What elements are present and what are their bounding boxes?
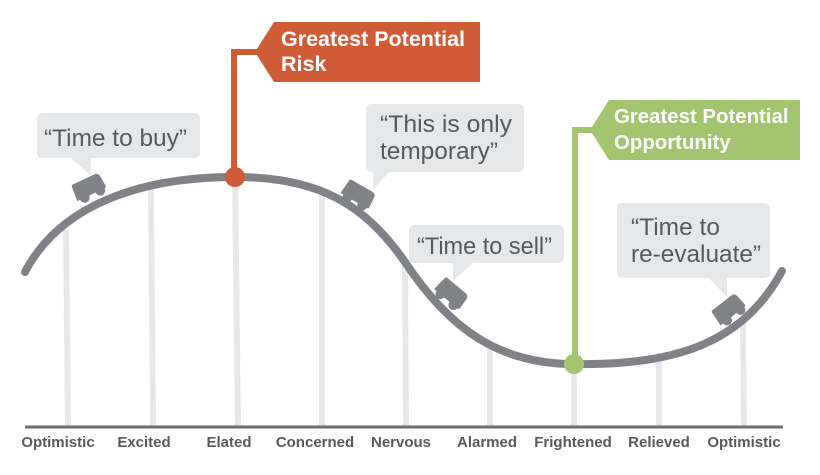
icon: car 1 [70, 172, 109, 206]
axis labels: Nervous [371, 434, 431, 451]
callout: time to re-evaluate: re-evaluate” [631, 241, 761, 268]
cycle curve [25, 177, 782, 364]
axis labels: Elated [206, 434, 252, 451]
icon: car 4 [710, 292, 749, 330]
icon: car 2 [338, 178, 377, 213]
callout: time to sell [409, 225, 564, 281]
marker: greatest potential opportunity: Opportunity [614, 132, 731, 154]
axis labels: Alarmed [457, 434, 517, 451]
axis labels: Excited [117, 434, 171, 451]
axis labels: Relieved [628, 434, 690, 451]
icon: car 3 [431, 276, 470, 313]
axis labels [21, 434, 781, 451]
callout: time to buy: “Time to buy” [44, 125, 187, 152]
axis labels: Concerned [276, 434, 354, 451]
axis labels: Frightened [534, 434, 612, 451]
callout: time to re-evaluate: “Time to [631, 214, 720, 241]
callout: this is only temporary: temporary” [380, 138, 498, 165]
callout: this is only temporary [366, 104, 524, 190]
axis labels: Optimistic [707, 434, 781, 451]
callout: this is only temporary: “This is only [380, 111, 513, 138]
marker: greatest potential risk: Risk [281, 52, 326, 76]
callout: time to buy [37, 113, 200, 176]
axis labels: Optimistic [21, 434, 95, 451]
marker: greatest potential opportunity: Greatest Potential [614, 106, 789, 128]
marker: greatest potential risk [225, 22, 480, 187]
callout: time to sell: “Time to sell” [417, 233, 552, 260]
marker: greatest potential risk: Greatest Potential [281, 27, 465, 51]
baseline axis [25, 426, 783, 428]
marker: greatest potential opportunity [564, 100, 800, 374]
callout: time to re-evaluate [617, 203, 770, 297]
